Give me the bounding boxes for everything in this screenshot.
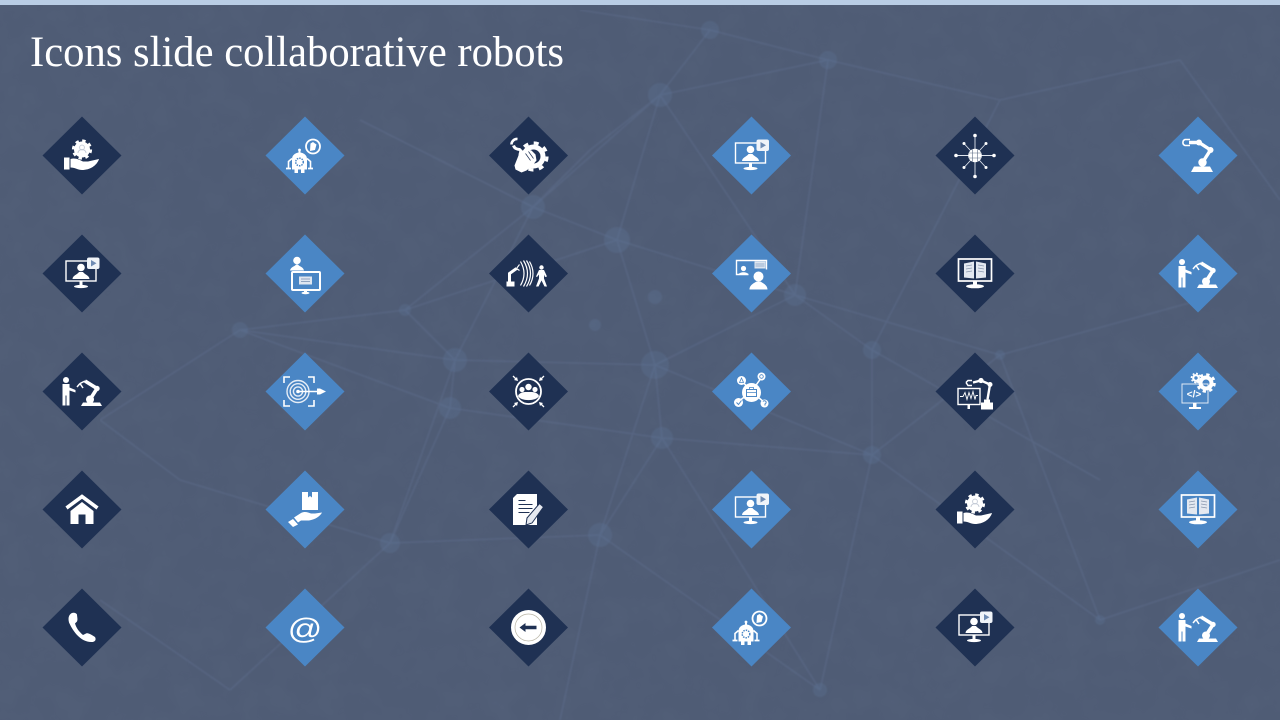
icon grid xyxy=(42,116,1238,666)
icon: video presenter on monitor xyxy=(712,116,791,194)
icon: robot arm with monitor graph xyxy=(936,352,1014,430)
icon: person presenting on screen xyxy=(266,234,344,312)
icon: person with robot arm xyxy=(1158,588,1238,666)
icon: robot safety field with walking person xyxy=(489,234,568,312)
icon: book on monitor xyxy=(1158,470,1238,548)
icon: hand holding box xyxy=(266,470,344,548)
icon: video presenter on monitor xyxy=(712,470,791,548)
icon: fist with wrench and gear xyxy=(489,116,568,194)
icon: global network hub xyxy=(936,116,1014,194)
icon: team focus with arrows xyxy=(489,352,568,430)
icon: code monitor with gears xyxy=(1158,352,1238,430)
icon: person with robot arm xyxy=(42,352,122,430)
top accent bar xyxy=(0,0,1280,5)
icon: telephone xyxy=(42,588,122,666)
icon: back arrow xyxy=(489,588,568,666)
icon: robot with no-touch badge xyxy=(266,116,344,194)
icon: email at sign: @ xyxy=(288,613,322,645)
icon: email at sign xyxy=(266,588,344,666)
icon: online meeting with chat xyxy=(712,234,791,312)
icon: target with dart xyxy=(266,352,344,430)
icon: home xyxy=(42,470,122,548)
icon: video presenter on monitor xyxy=(936,588,1014,666)
icon: person with robot arm xyxy=(1158,234,1238,312)
icon: document with pencil xyxy=(489,470,568,548)
icon: book on monitor xyxy=(936,234,1014,312)
icon: robot with no-touch badge xyxy=(712,588,791,666)
icon: briefcase network xyxy=(712,352,791,430)
icon: video presenter on monitor xyxy=(42,234,122,312)
icon: hand holding gear xyxy=(42,116,122,194)
title: Icons slide collaborative robots xyxy=(30,29,564,76)
icon: hand holding gear xyxy=(936,470,1014,548)
icon: robotic arm xyxy=(1158,116,1238,194)
